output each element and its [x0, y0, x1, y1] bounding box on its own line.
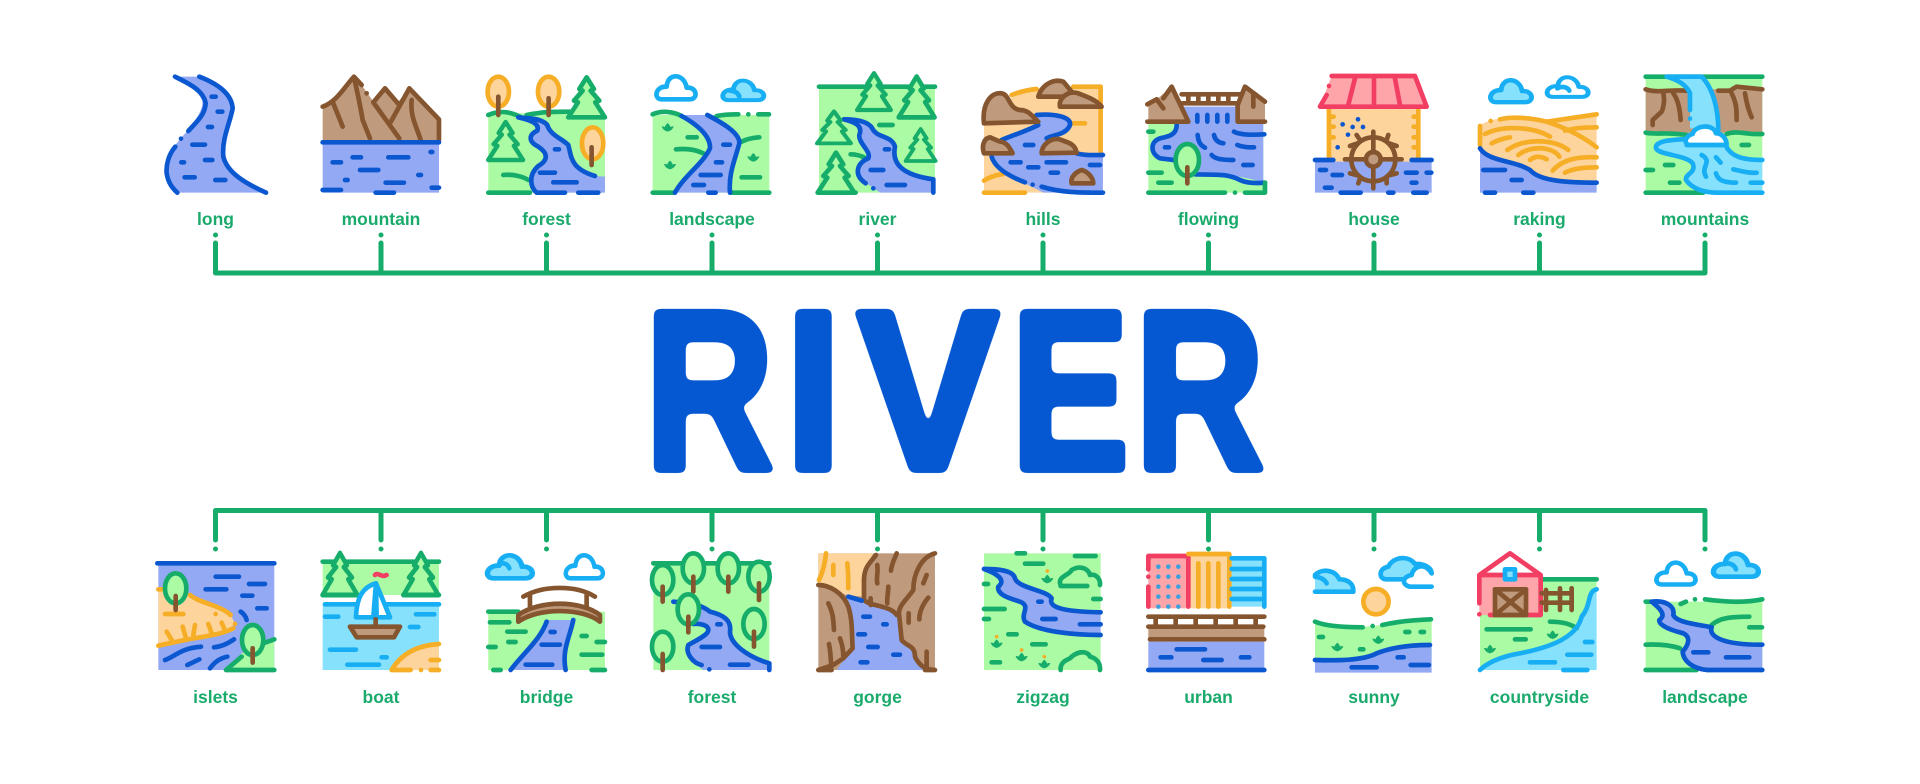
label: urban: urban — [1184, 687, 1233, 707]
label: landscape: landscape — [1662, 687, 1748, 707]
icon: water mill house — [1315, 76, 1432, 193]
top connector bracket — [216, 235, 1705, 273]
title: RIVER: I — [785, 265, 842, 518]
label: gorge: gorge — [853, 687, 902, 707]
icon: boat — [323, 553, 439, 670]
icon: mountain lake — [323, 77, 439, 193]
icon: landscape river — [1646, 554, 1762, 670]
icon: river among pines — [817, 73, 936, 193]
icon: landscape with clouds — [653, 76, 769, 193]
icon: mountains waterfall — [1646, 77, 1762, 193]
title: RIVER: E — [1011, 265, 1129, 518]
title: RIVER: R — [1135, 265, 1265, 518]
label: forest: forest — [688, 687, 736, 707]
icon: bridge — [487, 555, 605, 670]
label: sunny: sunny — [1348, 687, 1400, 707]
label: long: long — [197, 209, 234, 229]
icon: countryside barn — [1479, 553, 1597, 670]
icon: long river — [166, 77, 266, 193]
label: house: house — [1348, 209, 1400, 229]
label: mountain: mountain — [342, 209, 420, 229]
icon: gorge — [818, 553, 935, 670]
icon: flowing dam — [1147, 87, 1265, 193]
label: countryside: countryside — [1490, 687, 1589, 707]
title: RIVER: V — [857, 265, 999, 518]
label: flowing: flowing — [1178, 209, 1239, 229]
label: raking: raking — [1513, 209, 1566, 229]
title: RIVER: R — [645, 265, 774, 518]
label: mountains: mountains — [1661, 209, 1749, 229]
label: islets: islets — [193, 687, 238, 707]
icon: urban riverside — [1148, 554, 1264, 670]
label: bridge: bridge — [520, 687, 573, 707]
icon: hills river — [983, 81, 1103, 193]
label: forest: forest — [522, 209, 571, 229]
label: hills: hills — [1025, 209, 1061, 229]
label: zigzag: zigzag — [1016, 687, 1070, 707]
label: boat: boat — [363, 687, 400, 707]
icon: raking field — [1480, 77, 1597, 193]
label: landscape: landscape — [669, 209, 755, 229]
icon: islets — [157, 563, 274, 670]
icon: zigzag river — [984, 553, 1101, 670]
icon: sunny meadow — [1315, 558, 1432, 673]
icon: forest river — [488, 77, 605, 193]
label: river: river — [859, 209, 897, 229]
icon: forest river with round trees — [652, 553, 770, 670]
bottom connector bracket — [216, 510, 1705, 549]
